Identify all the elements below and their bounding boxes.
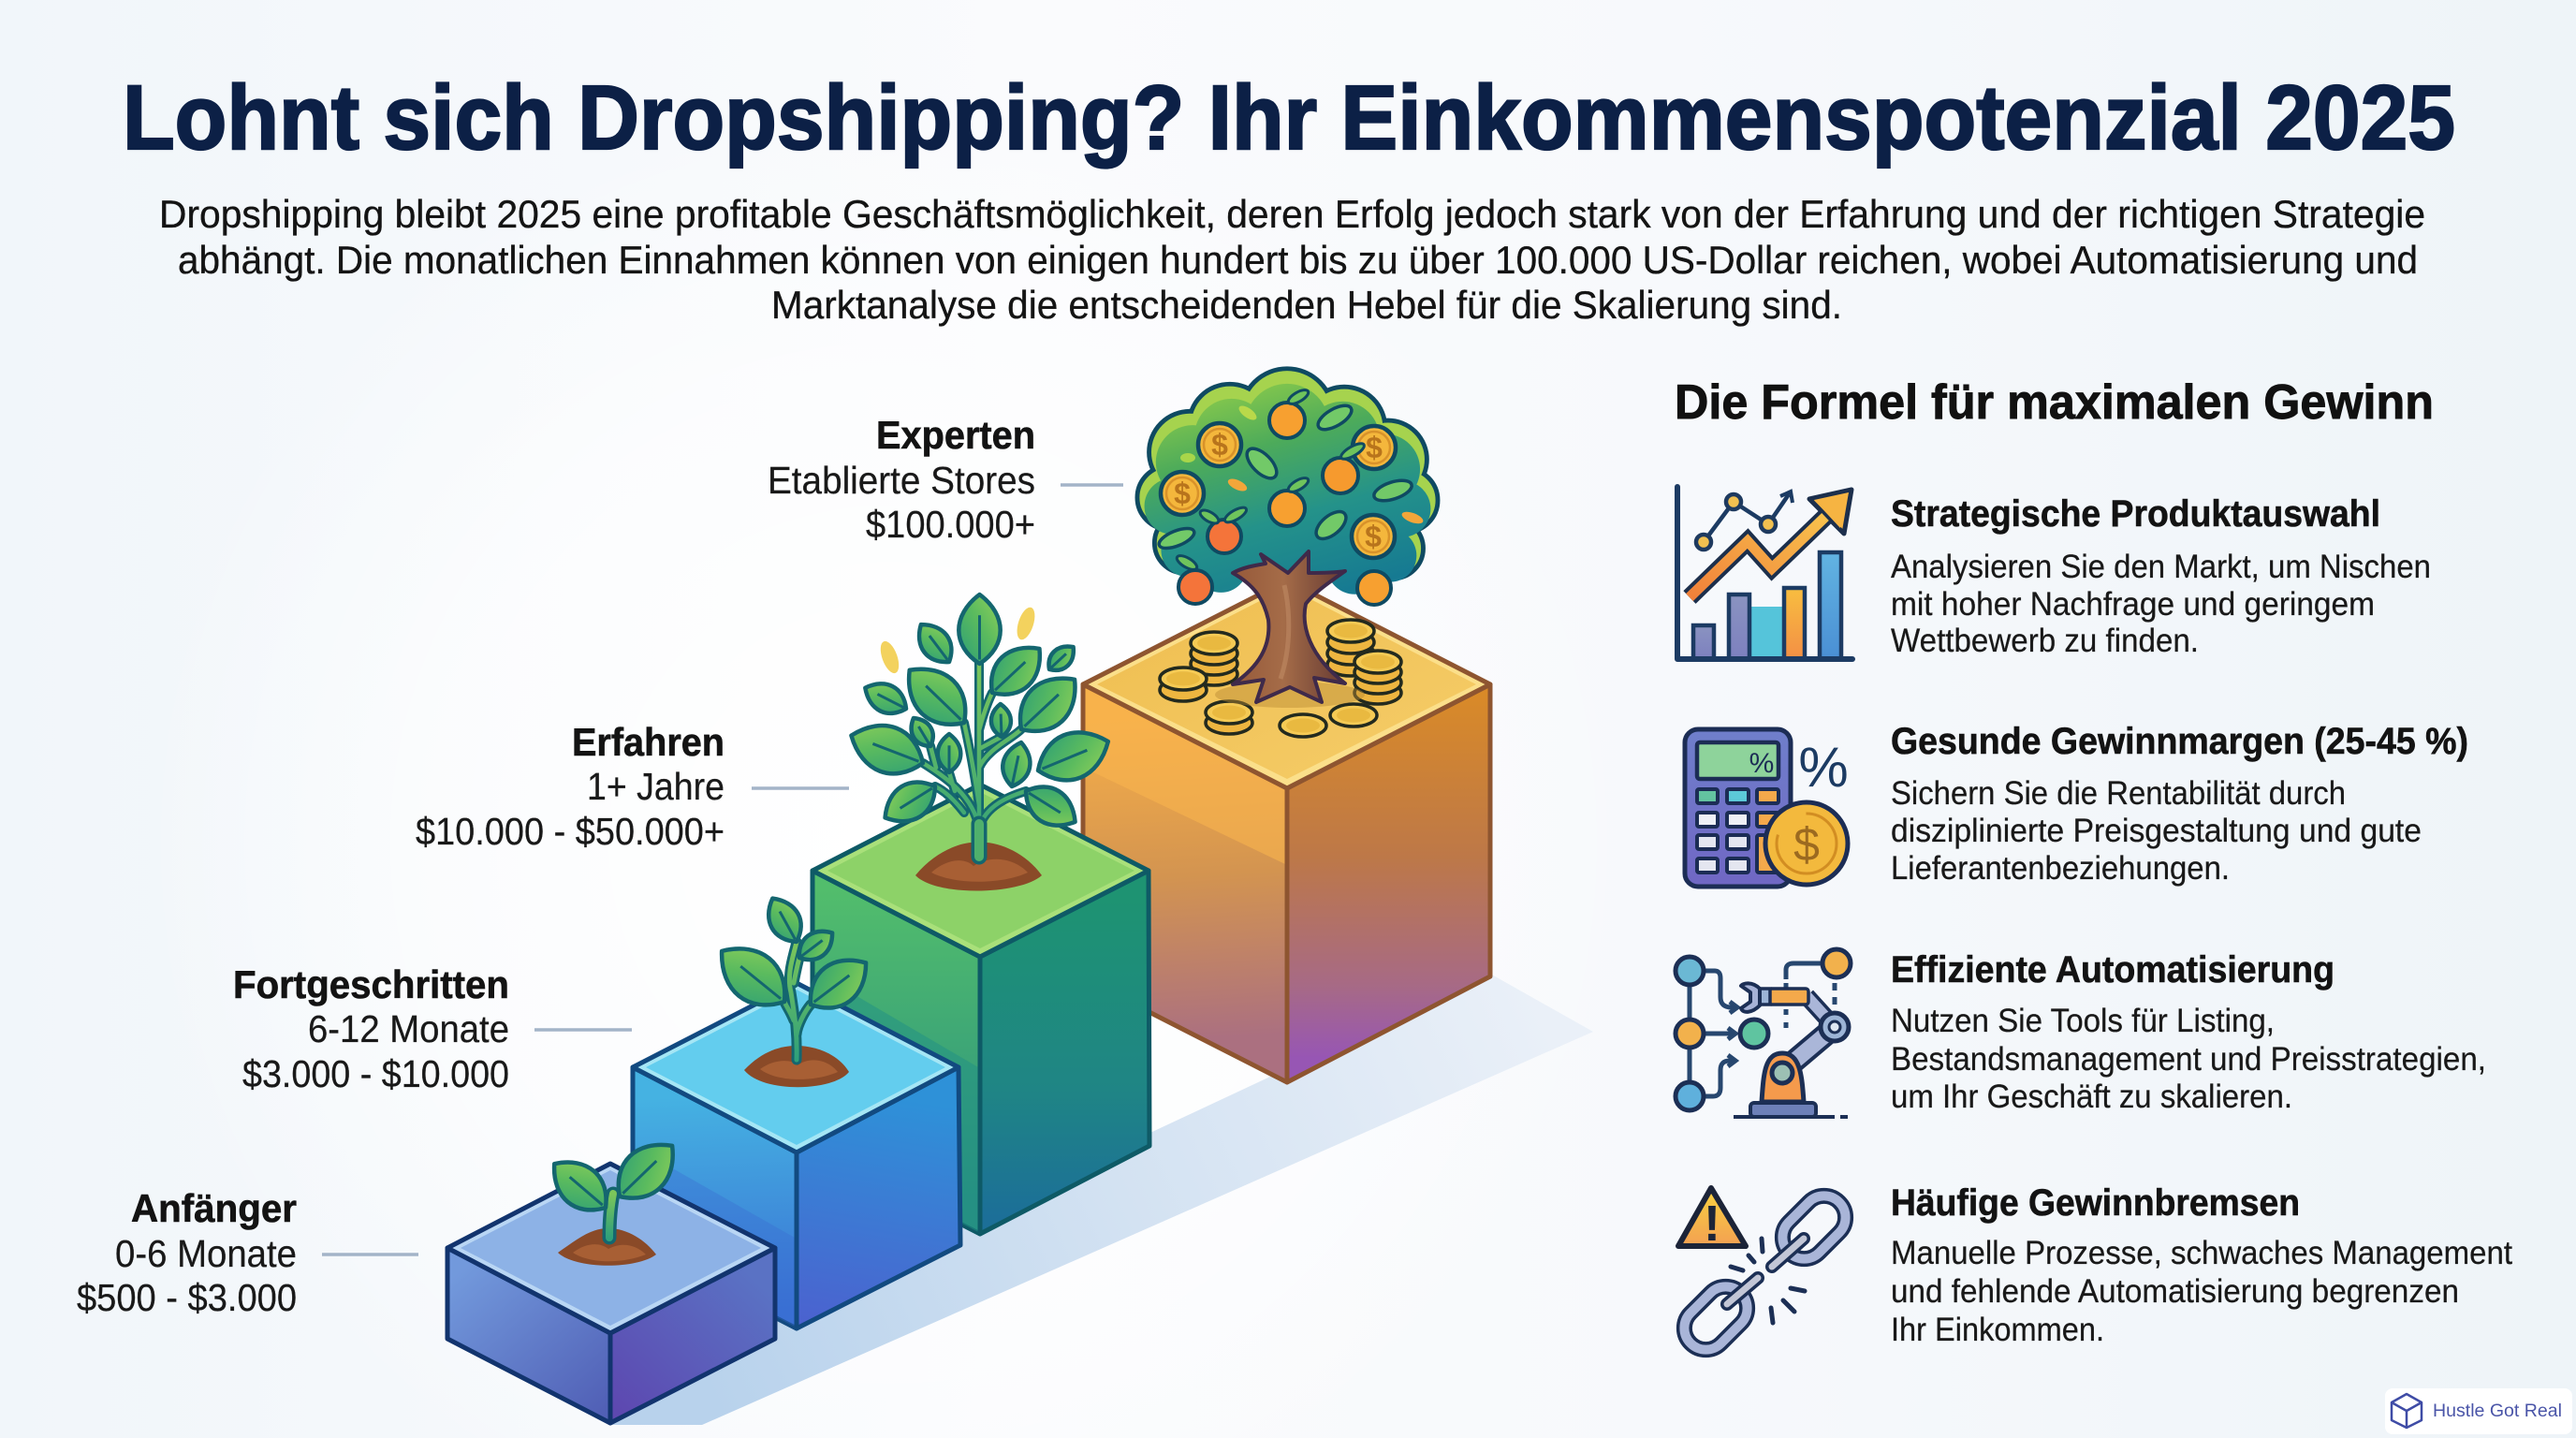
icon: calculator and coin: % [1749,748,1774,779]
label: experts [768,413,1123,546]
item title: Effiziente Automatisierung [1891,949,2334,990]
item description: mit hoher Nachfrage und geringem [1891,586,2375,623]
intro text: abhängt. Die monatlichen Einnahmen können von einigen hundert bis zu über 100.000 US-Dollar reichen, wobei Automatisierung und [178,238,2418,282]
step 2: advanced blue block [633,983,960,1328]
item description: Analysieren Sie den Markt, um Nischen [1891,549,2431,585]
label: advanced: 6-12 Monate [308,1007,509,1050]
floor shadow [610,974,1593,1425]
item description [1891,775,2422,887]
step 4: experts gold block [1083,580,1490,1082]
icon: sprout with four leaves [707,891,878,1087]
item title: Gesunde Gewinnmargen (25-45 %) [1891,721,2468,762]
item title: Häufige Gewinnbremsen [1891,1182,2300,1224]
icon: warning and broken chain [1676,1187,1854,1358]
icon: growth chart [1677,487,1852,659]
tree coins [1161,423,1396,558]
panel: automation [1676,949,2486,1117]
label: beginner: $500 - $3.000 [77,1276,297,1319]
icon: money tree [1140,372,1435,708]
item description [1891,1235,2512,1348]
item description: Ihr Einkommen. [1891,1312,2104,1348]
step 1: beginner indigo block [447,1164,775,1423]
icon: warning and broken chain: ! [1704,1196,1720,1252]
label: experts: Etablierte Stores [768,459,1035,502]
label: experts: $100.000+ [866,503,1035,546]
icon: young tree [843,594,1117,891]
icon: cube [2392,1394,2422,1428]
item description: um Ihr Geschäft zu skalieren. [1891,1078,2292,1115]
watermark badge: Hustle Got Real [2433,1401,2562,1421]
intro text: Dropshipping bleibt 2025 eine profitable Geschäftsmöglichkeit, deren Erfolg jedoch stark von der Erfahrung und der richtigen Strategie [159,192,2425,236]
label: experienced: 1+ Jahre [587,765,724,808]
label: experienced [416,720,849,853]
panel: profit margins [1685,721,2468,887]
item description: disziplinierte Preisgestaltung und gute [1891,813,2422,849]
coin symbols: $ [1366,431,1383,464]
icon: coin stacks [1160,620,1401,737]
coin symbols: $ [1174,477,1191,510]
tree fruit [1178,403,1391,605]
item title: Strategische Produktauswahl [1891,493,2380,535]
label: advanced [233,962,632,1095]
panel: product selection [1677,487,2431,659]
intro text: Marktanalyse die entscheidenden Hebel für die Skalierung sind. [771,283,1842,327]
label: advanced: Fortgeschritten [233,962,509,1006]
label: beginner [77,1186,418,1319]
label: advanced: $3.000 - $10.000 [242,1052,509,1095]
coin symbols: $ [1365,520,1382,553]
label: beginner: 0-6 Monate [115,1232,297,1275]
label: experienced: Erfahren [572,720,724,764]
title: Lohnt sich Dropshipping? Ihr Einkommenspotenzial 2025 [123,66,2455,169]
item description [1891,549,2431,659]
coin symbols [1174,428,1383,553]
label: experts: Experten [876,413,1035,457]
icon: calculator and coin [1685,729,1849,887]
label: beginner: Anfänger [131,1186,297,1230]
item description: Lieferantenbeziehungen. [1891,850,2230,887]
heading: formula: Die Formel für maximalen Gewinn [1675,375,2434,430]
label: experienced: $10.000 - $50.000+ [416,810,724,853]
item description: Wettbewerb zu finden. [1891,623,2199,659]
watermark badge [2385,1388,2572,1434]
item description [1891,1003,2486,1115]
item description: Manuelle Prozesse, schwaches Management [1891,1235,2512,1271]
icon: seedling [541,1130,687,1266]
intro text [159,192,2425,327]
icon: workflow and robot arm [1676,949,1851,1117]
step 3: experienced green block [812,785,1149,1234]
item description: Bestandsmanagement und Preisstrategien, [1891,1041,2486,1078]
icon: calculator and coin: $ [1793,818,1820,871]
icon: calculator and coin: % [1798,736,1849,799]
coin symbols: $ [1211,428,1228,462]
panel: income staircase [447,372,1593,1425]
item description: und fehlende Automatisierung begrenzen [1891,1273,2459,1310]
item description: Nutzen Sie Tools für Listing, [1891,1003,2275,1039]
panel: profit brakes [1676,1182,2512,1358]
item description: Sichern Sie die Rentabilität durch [1891,775,2346,812]
